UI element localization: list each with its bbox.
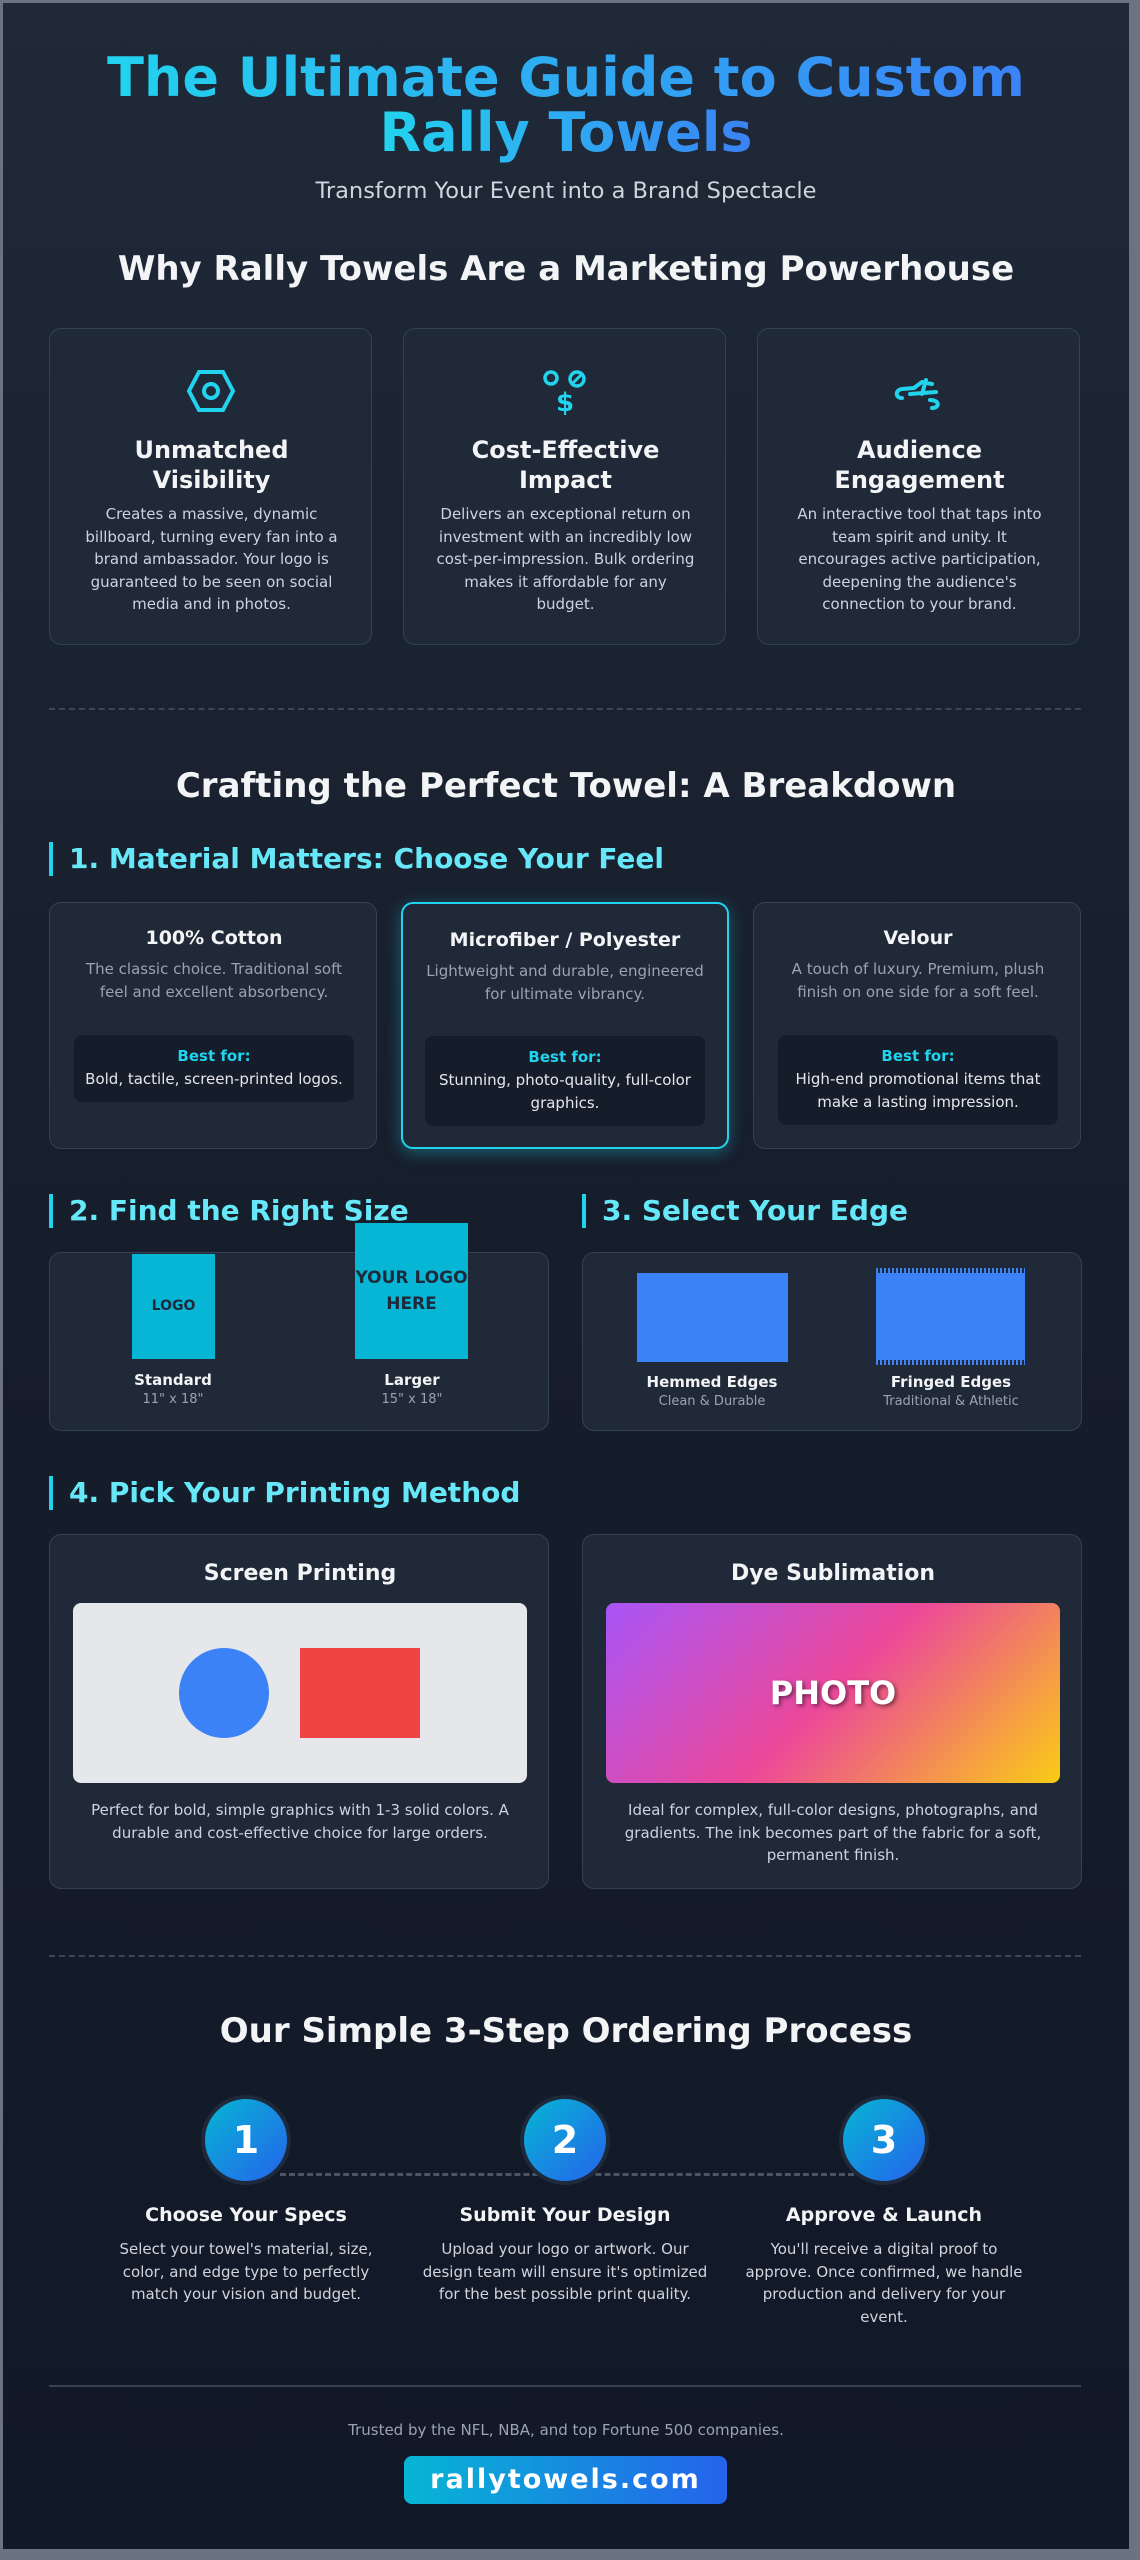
card text: Delivers an exceptional return on xyxy=(440,505,691,523)
material text xyxy=(792,960,1044,1001)
step text: Upload your logo or artwork. Our xyxy=(441,2240,689,2258)
subheading: edge: 3. Select Your Edge xyxy=(602,1194,908,1227)
step text xyxy=(120,2240,372,2303)
towel: standard xyxy=(132,1254,215,1359)
panel: dye sublimation xyxy=(582,1534,1082,1889)
card text: guaranteed to be seen on social xyxy=(91,573,332,591)
card title xyxy=(472,436,659,494)
graphic: photo gradient: PHOTO xyxy=(770,1674,896,1712)
edge: fringed xyxy=(876,1268,1025,1365)
step circle xyxy=(839,2095,929,2185)
step text: You'll receive a digital proof to xyxy=(771,2240,997,2258)
step text: color, and edge type to perfectly xyxy=(123,2263,369,2281)
card text: encourages active participation, xyxy=(798,550,1041,568)
heading: ordering process: Our Simple 3-Step Ordering Process xyxy=(220,2011,912,2051)
step text: design team will ensure it's optimized xyxy=(423,2263,707,2281)
best for box: Stunning, photo-quality, full-color xyxy=(439,1071,691,1089)
card text xyxy=(797,505,1042,613)
print text: Ideal for complex, full-color designs, photographs, and xyxy=(628,1801,1038,1819)
card text: deepening the audience's xyxy=(822,573,1017,591)
panel: microfiber xyxy=(401,902,729,1149)
step circle: 1 xyxy=(233,2118,259,2162)
card text: An interactive tool that taps into xyxy=(797,505,1042,523)
card text xyxy=(85,505,338,613)
best for box: High-end promotional items that xyxy=(795,1070,1041,1088)
material text: Lightweight and durable, engineered xyxy=(426,962,704,980)
towel: larger xyxy=(355,1223,468,1359)
icon: dollar xyxy=(543,370,586,415)
label: fringed: Traditional & Athletic xyxy=(883,1394,1019,1409)
label: standard: 11" x 18" xyxy=(142,1392,204,1407)
print text: durable and cost-effective choice for large orders. xyxy=(112,1824,488,1842)
card title xyxy=(134,436,289,494)
best for box: graphics. xyxy=(531,1094,599,1112)
step 3 xyxy=(745,2095,1023,2326)
card text: media and in photos. xyxy=(132,595,291,613)
step text: Select your towel's material, size, xyxy=(120,2240,372,2258)
step circle xyxy=(520,2095,610,2185)
title xyxy=(107,46,1025,164)
subheading: printing: 4. Pick Your Printing Method xyxy=(69,1476,520,1509)
card title: Cost-Effective xyxy=(472,436,659,464)
card text: billboard, turning every fan into a xyxy=(85,528,338,546)
card text: Creates a massive, dynamic xyxy=(106,505,317,523)
step text: for the best possible print quality. xyxy=(439,2285,691,2303)
card title: Impact xyxy=(519,466,612,494)
print text xyxy=(91,1801,509,1842)
subheading: material: 1. Material Matters: Choose Your Feel xyxy=(69,842,664,875)
print text xyxy=(625,1801,1041,1864)
towel: standard: LOGO xyxy=(152,1298,195,1314)
card title: Audience xyxy=(857,436,982,464)
panel: size xyxy=(49,1252,549,1431)
material text: The classic choice. Traditional soft xyxy=(86,960,342,978)
material text: finish on one side for a soft feel. xyxy=(797,983,1039,1001)
panel: cotton xyxy=(49,902,377,1149)
icon: hexagon xyxy=(186,370,236,412)
card text: makes it affordable for any xyxy=(464,573,667,591)
card title: Engagement xyxy=(834,466,1005,494)
footer: website button: rallytowels.com xyxy=(430,2464,701,2495)
best for box xyxy=(425,1036,705,1126)
step 2 xyxy=(423,2095,707,2303)
best for box xyxy=(778,1035,1058,1125)
card title: Visibility xyxy=(153,466,270,494)
label: fringed xyxy=(883,1373,1019,1409)
best for box: make a lasting impression. xyxy=(817,1093,1019,1111)
best for box: Bold, tactile, screen-printed logos. xyxy=(85,1070,343,1088)
step circle xyxy=(201,2095,291,2185)
label: hemmed: Hemmed Edges xyxy=(647,1373,777,1391)
subheading: size: 2. Find the Right Size xyxy=(69,1194,409,1227)
step title: Choose Your Specs xyxy=(145,2204,347,2226)
step text: approve. Once confirmed, we handle xyxy=(745,2263,1023,2281)
step 1 xyxy=(120,2095,372,2303)
panel: unmatched visibility xyxy=(49,328,372,645)
card text: cost-per-impression. Bulk ordering xyxy=(437,550,694,568)
title: Rally Towels xyxy=(380,101,752,164)
step circle: 3 xyxy=(871,2118,897,2162)
best for box xyxy=(74,1035,354,1102)
card title: Unmatched xyxy=(134,436,289,464)
subtitle: Transform Your Event into a Brand Spectacle xyxy=(315,178,817,204)
heading: crafting: Crafting the Perfect Towel: A Breakdown xyxy=(176,766,956,806)
best for box: Best for: xyxy=(177,1047,251,1065)
step text: match your vision and budget. xyxy=(131,2285,361,2303)
label: larger xyxy=(381,1371,442,1407)
card title xyxy=(834,436,1005,494)
step text: production and delivery for your xyxy=(763,2285,1005,2303)
panel: cost-effective xyxy=(403,328,726,645)
heading: why rally towels: Why Rally Towels Are a Marketing Powerhouse xyxy=(118,249,1014,289)
card text: budget. xyxy=(537,595,594,613)
panel: audience engagement xyxy=(757,328,1080,645)
label: standard: Standard xyxy=(134,1371,212,1389)
panel: edge xyxy=(582,1252,1082,1431)
best for box: Best for: xyxy=(528,1048,602,1066)
card text: brand ambassador. Your logo is xyxy=(94,550,329,568)
material text: feel and excellent absorbency. xyxy=(100,983,328,1001)
icon: handshake xyxy=(894,378,940,410)
material title: 100% Cotton xyxy=(145,927,283,949)
footer: trusted: Trusted by the NFL, NBA, and top Fortune 500 companies. xyxy=(348,2421,784,2439)
graphic: solid shapes xyxy=(73,1603,527,1783)
material title: Microfiber / Polyester xyxy=(450,929,680,951)
step title: Approve & Launch xyxy=(786,2204,982,2226)
panel: velour xyxy=(753,902,1081,1149)
material text: A touch of luxury. Premium, plush xyxy=(792,960,1044,978)
label: hemmed: Clean & Durable xyxy=(659,1394,765,1409)
step text: event. xyxy=(860,2308,908,2326)
step text xyxy=(745,2240,1023,2326)
print title: Screen Printing xyxy=(204,1561,396,1586)
edge: hemmed xyxy=(637,1273,788,1362)
towel: larger: HERE xyxy=(386,1294,437,1314)
material title: Velour xyxy=(883,927,952,949)
print title: Dye Sublimation xyxy=(731,1561,935,1586)
card text: team spirit and unity. It xyxy=(832,528,1007,546)
label: larger: Larger xyxy=(384,1371,440,1389)
label: larger: 15" x 18" xyxy=(381,1392,442,1407)
connector: dashed line xyxy=(280,2173,854,2176)
step circle: 2 xyxy=(552,2118,578,2162)
label: fringed: Fringed Edges xyxy=(891,1373,1011,1391)
print text: permanent finish. xyxy=(767,1846,899,1864)
card text: investment with an incredibly low xyxy=(439,528,692,546)
material text xyxy=(426,962,704,1003)
print text: gradients. The ink becomes part of the fabric for a soft, xyxy=(625,1824,1041,1842)
label: standard xyxy=(134,1371,212,1407)
footer: website button xyxy=(404,2456,727,2504)
towel: larger: YOUR LOGO xyxy=(355,1268,468,1288)
step text xyxy=(423,2240,707,2303)
title: The Ultimate Guide to Custom xyxy=(107,46,1025,109)
print text: Perfect for bold, simple graphics with 1-3 solid colors. A xyxy=(91,1801,509,1819)
material text: for ultimate vibrancy. xyxy=(485,985,645,1003)
material text xyxy=(86,960,342,1001)
label: hemmed xyxy=(647,1373,777,1409)
card text xyxy=(437,505,694,613)
panel: screen printing xyxy=(49,1534,549,1889)
card text: connection to your brand. xyxy=(822,595,1017,613)
graphic: photo gradient xyxy=(606,1603,1060,1783)
step title: Submit Your Design xyxy=(459,2204,670,2226)
best for box: Best for: xyxy=(881,1047,955,1065)
